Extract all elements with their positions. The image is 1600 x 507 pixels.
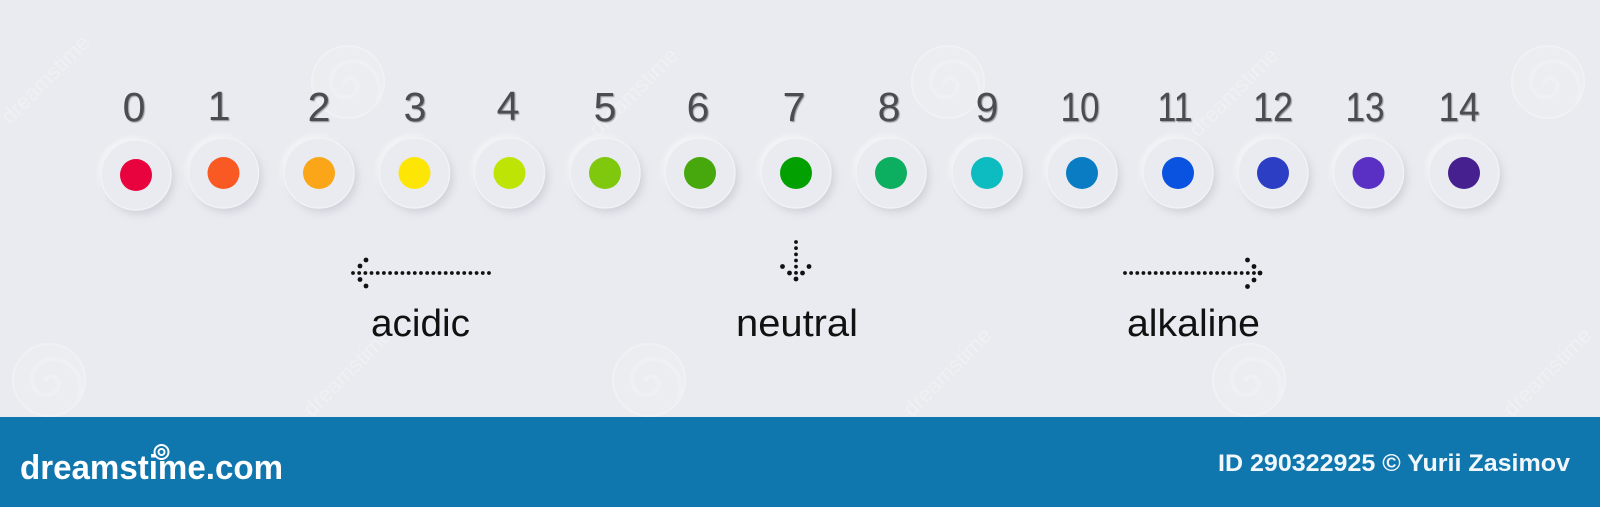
- watermark pattern: dreamstime: [1498, 323, 1597, 422]
- button 14: [1429, 138, 1499, 208]
- button 8: [856, 138, 926, 208]
- watermark pattern: dreamstime: [584, 43, 683, 142]
- footer credit: ID 290322925 © Yurii Zasimov: [1218, 450, 1570, 477]
- button 0: [101, 140, 171, 210]
- arrow: neutral (dotted down): [780, 242, 811, 281]
- pH scale numbers: 14: [1438, 84, 1480, 130]
- button 11: [1143, 138, 1213, 208]
- pH scale numbers: 8: [878, 84, 900, 130]
- arrow: acidic (dotted left): [353, 258, 490, 288]
- icon: logo spiral: [154, 445, 168, 459]
- watermark pattern: dreamstime: [1184, 43, 1283, 142]
- label: neutral: neutral: [736, 303, 858, 345]
- pH scale numbers: [123, 83, 1480, 130]
- pH scale numbers: 5: [594, 84, 616, 130]
- watermark pattern: dreamstime: [298, 323, 397, 422]
- pH scale numbers: 11: [1158, 84, 1192, 130]
- pH scale numbers: 7: [783, 84, 805, 130]
- label: alkaline: alkaline: [1127, 303, 1260, 345]
- pH scale numbers: 6: [687, 84, 709, 130]
- pH scale numbers: 13: [1346, 84, 1384, 130]
- button 13: [1334, 138, 1404, 208]
- button 7: [761, 138, 831, 208]
- button 1: [188, 138, 258, 208]
- pH scale numbers: 4: [497, 83, 519, 129]
- footer bar: [0, 417, 1600, 507]
- button 3: [380, 138, 450, 208]
- button 6: [665, 138, 735, 208]
- button 12: [1238, 138, 1308, 208]
- button 4: [474, 138, 544, 208]
- pH scale numbers: 9: [976, 84, 998, 130]
- button 2: [284, 138, 354, 208]
- pH scale numbers: 1: [208, 83, 230, 129]
- button 10: [1047, 138, 1117, 208]
- button 9: [952, 138, 1022, 208]
- watermark pattern: dreamstime: [898, 323, 997, 422]
- footer logo: dreamstime.com: [20, 449, 283, 487]
- pH scale numbers: 0: [123, 84, 145, 130]
- pH colour buttons: [101, 138, 1499, 210]
- arrow: alkaline (dotted right): [1125, 258, 1262, 289]
- pH scale numbers: 10: [1060, 84, 1100, 130]
- pH scale numbers: 2: [308, 84, 330, 130]
- label: acidic: acidic: [371, 303, 470, 345]
- watermark pattern: [0, 30, 1597, 422]
- button 5: [570, 138, 640, 208]
- pH scale numbers: 12: [1253, 84, 1293, 130]
- pH scale numbers: 3: [404, 84, 426, 130]
